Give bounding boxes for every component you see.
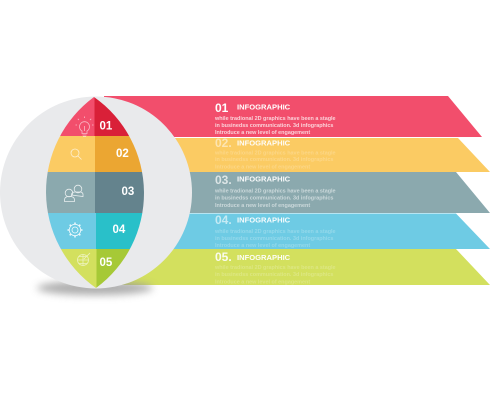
- panel: bar 5: [100, 249, 490, 286]
- panel: bar 2: INFOGRAPHIC: [237, 138, 291, 148]
- grey circle: [0, 96, 192, 288]
- panel: bar 3: INFOGRAPHIC: [237, 174, 291, 184]
- panel: bar 3: 03.: [215, 173, 232, 187]
- panel: bar 5: INFOGRAPHIC: [237, 253, 291, 262]
- panel: bar 4: INFOGRAPHIC: [237, 216, 291, 224]
- panel: bar 3: Introduce a new level of engagement: [215, 203, 310, 209]
- panel: bar 5: 05.: [215, 250, 232, 264]
- segment numbers: 01: [100, 120, 113, 132]
- panel: bar 3: in businedss communication. 3d infographics: [215, 196, 333, 202]
- segment 4: [48, 213, 142, 249]
- panel: bar 2: in businedss communication. 3d infographics: [215, 157, 333, 163]
- panel: bar 4: Introduce a new level of engagement: [215, 243, 310, 249]
- segment numbers: 02: [116, 148, 129, 160]
- segment 2: [48, 136, 142, 172]
- panel: bar 1: INFOGRAPHIC: [237, 102, 291, 112]
- panel: bar 2: while tradional 2D graphics have been a stagle: [214, 150, 336, 156]
- segment numbers: [100, 120, 134, 269]
- panel: bar 1: Introduce a new level of engagement: [215, 130, 310, 136]
- panel: bar 2: 02.: [215, 136, 232, 150]
- panel: bar 1: [104, 96, 482, 137]
- icon: people: [64, 185, 83, 202]
- icon: magnifier: [71, 149, 82, 160]
- panel: bar 4: while tradional 2D graphics have been a stagle: [214, 229, 336, 235]
- panel: bar 1: 01: [215, 101, 229, 115]
- panel: bar 3: [100, 172, 490, 213]
- panel: bar 2: [100, 136, 490, 172]
- segment numbers: 03: [122, 186, 134, 198]
- panel: bar 2: Introduce a new level of engagement: [215, 164, 310, 170]
- segment 3: [46, 172, 144, 213]
- panel: bar 4: [100, 213, 490, 249]
- panel: bar 1: while tradional 2D graphics have been a stagle: [214, 116, 336, 122]
- leaf segments: [46, 97, 144, 288]
- panel: bar 4: in businedss communication. 3d infographics: [215, 236, 333, 242]
- panel: bar 5: while tradional 2D graphics have been a stagle: [214, 265, 336, 271]
- icon: light bulb: [76, 116, 94, 136]
- panel: bar 1: in businedss communication. 3d infographics: [215, 123, 333, 129]
- panel: bar 3: while tradional 2D graphics have been a stagle: [214, 188, 336, 194]
- ground shadow: [37, 281, 153, 295]
- segment 5: [61, 249, 130, 288]
- panel: bar 4: 04.: [215, 213, 232, 227]
- segment 1: [60, 97, 129, 136]
- panel: bar 5: in businedss communication. 3d infographics: [215, 272, 333, 278]
- segment numbers: 05: [100, 257, 113, 269]
- icon: globe with rocket: [78, 253, 90, 266]
- icon: gear: [68, 222, 82, 238]
- segment numbers: 04: [112, 224, 126, 236]
- panel: bar 5: Introduce a new level of engagement: [215, 280, 310, 286]
